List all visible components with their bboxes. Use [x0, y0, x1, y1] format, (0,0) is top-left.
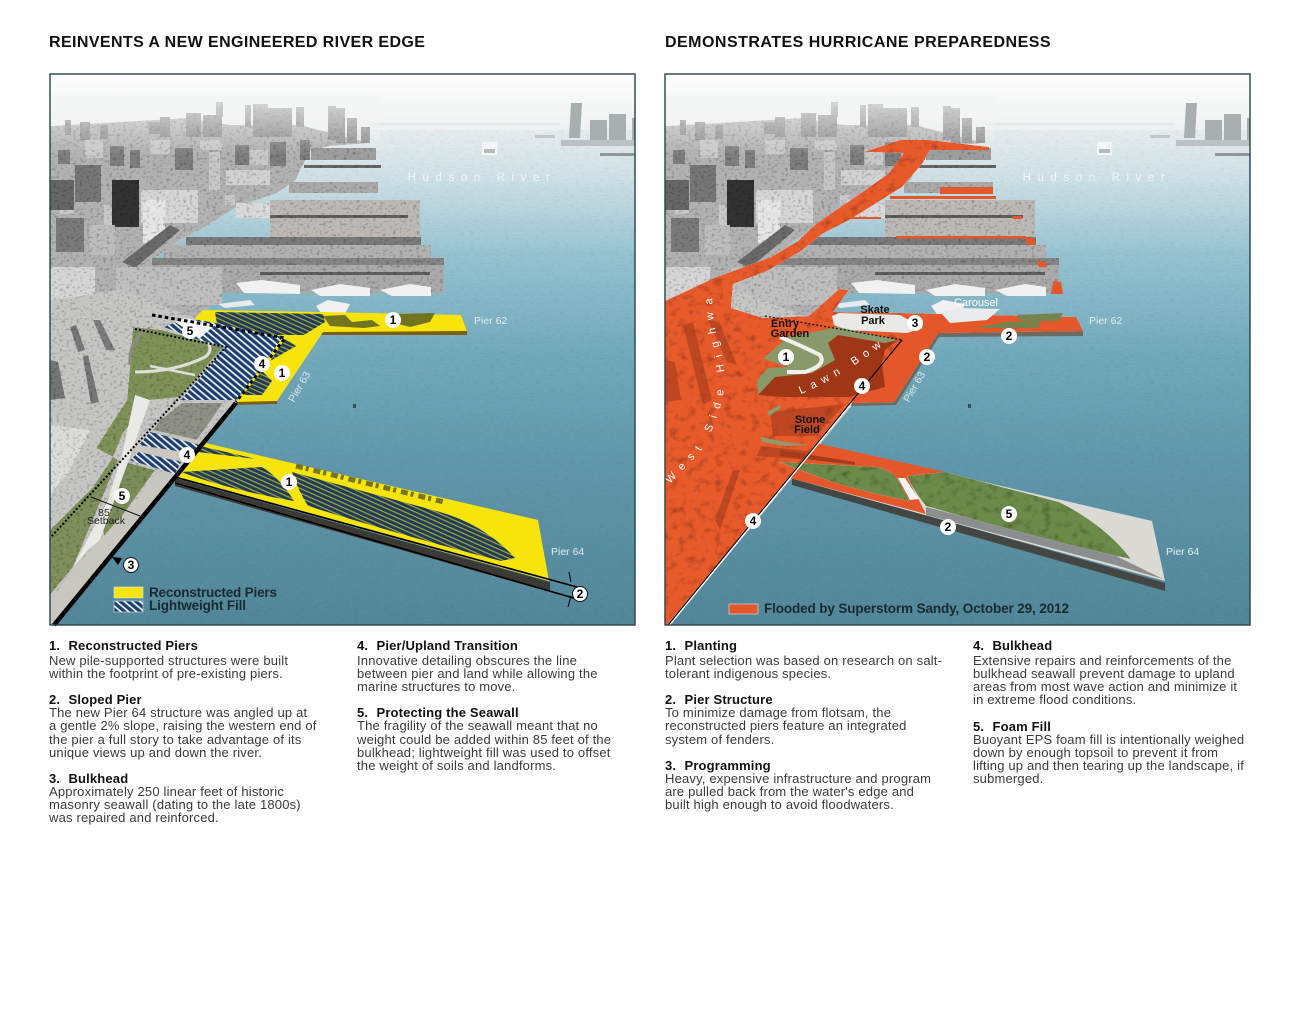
text column 4: areas from most wave action and minimize it [973, 679, 1237, 694]
setback dimension: 85' [98, 507, 112, 519]
text column 1: the pier a full story to take advantage of its [49, 732, 302, 747]
text column 3: Planting [684, 638, 737, 652]
text column 2: 4. [357, 638, 368, 652]
text column 3: 3. [665, 758, 676, 773]
text column 2: weight could be added within 85 feet of the [357, 732, 611, 747]
text column 4: 4. [973, 638, 984, 652]
place labels: Stone [795, 414, 825, 426]
aerial photo base [50, 74, 635, 625]
setback dimension: Setback [87, 515, 126, 527]
legend: Flooded by Superstorm Sandy, October 29, 2012 [764, 601, 1069, 616]
number badges: 4 [184, 448, 191, 462]
text column 1: 3. [49, 771, 60, 786]
number badges: 4 [259, 357, 266, 371]
text column 4: 5. [973, 719, 984, 734]
place labels: Field [794, 424, 820, 436]
garden planting [757, 327, 898, 395]
number badges: 4 [859, 379, 866, 393]
text column 1: 2. [49, 692, 60, 707]
dotted line: pier and land boundary [50, 315, 285, 538]
carousel [940, 308, 1000, 323]
text column 1: within the footprint of pre-existing piers. The new Pier 64 structure was angled up at [49, 666, 307, 720]
pier 62 planting [979, 313, 1063, 328]
slope dimension lines [175, 477, 577, 607]
text column 3: Programming [684, 758, 771, 773]
number badges: 1 [279, 366, 286, 380]
text column 1: a gentle 2% slope, raising the western end of [49, 718, 317, 733]
text column 2: marine structures to move. The fragility of the seawall meant that no [357, 679, 598, 733]
text column 2: bulkhead; lightweight fill was used to offset [357, 745, 611, 760]
Lawn Bowl label: Lawn Bowl [798, 342, 880, 394]
bulkhead line [668, 340, 902, 625]
pier 64 deck [779, 443, 1165, 591]
text column 3: Pier Structure [684, 692, 773, 707]
text column 2: the weight of soils and landforms. [357, 758, 556, 773]
text column 2: Innovative detailing obscures the line [357, 652, 577, 668]
bulkhead line [54, 403, 236, 625]
place labels: Garden [771, 328, 810, 340]
number badges: 5 [1006, 507, 1013, 521]
pier 63 label: Pier 63 [901, 370, 928, 404]
place labels [771, 304, 890, 436]
pier 62 and 63 yellow deck [194, 310, 467, 405]
text column 1 [49, 638, 317, 825]
Hudson River label: Hudson River [408, 172, 556, 184]
text column 1: Sloped Pier [68, 692, 142, 707]
text column 3: built high enough to avoid floodwaters. [665, 797, 894, 812]
text column 1: unique views up and down the river. Approximately 250 linear feet of historic [49, 745, 284, 799]
number badges [114, 312, 588, 602]
lawn bowl [758, 335, 898, 397]
text column 3: tolerant indigenous species. To minimize damage from flotsam, the [665, 666, 891, 720]
pier 64 yellow deck [175, 442, 550, 592]
text column 4 [973, 638, 1244, 786]
pier 62 label: Pier 62 [474, 315, 507, 327]
text column 3: reconstructed piers feature an integrated [665, 718, 907, 733]
flood extent: land and upper road [665, 140, 1083, 625]
carousel label: Carousel [954, 297, 998, 309]
number badges [745, 315, 1017, 535]
heading: river edge: REINVENTS A NEW ENGINEERED RIVER EDGE [49, 34, 425, 51]
text column 3: 1. [665, 638, 676, 652]
number badges: 5 [119, 489, 126, 503]
text column 3: are pulled back from the water's edge and [665, 784, 914, 799]
text column 4: in extreme flood conditions. Buoyant EPS foam fill is intentionally weighed [973, 692, 1244, 747]
pier 64 label: Pier 64 [551, 546, 584, 558]
text column 1: was repaired and reinforced. [49, 810, 219, 825]
skate park [832, 313, 923, 333]
pier 64 label: Pier 64 [1166, 546, 1199, 558]
text column 2 [357, 638, 611, 773]
West Side Highway label: West Side Highway [666, 298, 724, 482]
text column 4: Bulkhead [992, 638, 1052, 652]
text column 3: Plant selection was based on research on salt- [665, 652, 942, 668]
number badges: 1 [783, 350, 790, 364]
seawall line [669, 403, 851, 625]
place labels: Entry [771, 318, 800, 330]
text column 4: Foam Fill [992, 719, 1051, 734]
text column 4: Extensive repairs and reinforcements of the [973, 652, 1231, 668]
number badges: 3 [912, 316, 919, 330]
text column 2: Protecting the Seawall [376, 705, 519, 720]
text column 2: 5. [357, 705, 368, 720]
setback dimension [87, 497, 140, 527]
text column 4: submerged. [973, 771, 1043, 786]
aerial photo base [665, 74, 1250, 625]
text column 1: Bulkhead [68, 771, 128, 786]
pier 63 label: Pier 63 [286, 370, 313, 404]
Hudson River label: Hudson River [1023, 172, 1171, 184]
dashed boundary [765, 316, 902, 340]
pier 62 label: Pier 62 [1089, 315, 1122, 327]
legend [114, 585, 277, 613]
panel: river edge map [50, 74, 635, 625]
panel frame [665, 74, 1250, 625]
text column 1: New pile-supported structures were built [49, 652, 288, 668]
text column 3: 2. [665, 692, 676, 707]
text column 3: system of fenders. Heavy, expensive infrastructure and program [665, 732, 931, 786]
garden path [780, 337, 822, 372]
text column 1: masonry seawall (dating to the late 1800s) [49, 797, 301, 812]
panel: hurricane map [664, 73, 1251, 626]
number badges: 1 [390, 313, 397, 327]
text column 1: Reconstructed Piers [68, 638, 198, 652]
stone field planting [760, 405, 811, 446]
number badges: 1 [286, 475, 293, 489]
text column 4: lifting up and then tearing up the landscape, if [973, 758, 1244, 773]
hatched fill: pier 64 [130, 432, 515, 561]
legend: Lightweight Fill [149, 598, 246, 613]
text column 1: 1. [49, 638, 60, 652]
number badges: 4 [750, 514, 757, 528]
place labels: Park [861, 315, 886, 327]
legend: Reconstructed Piers [149, 585, 277, 600]
number badges: 2 [945, 520, 952, 534]
number badges: 2 [577, 587, 584, 601]
text column 2: between pier and land while allowing the [357, 666, 598, 681]
panel frame [50, 74, 635, 625]
text column 3 [665, 638, 942, 812]
hatched fill: pier 62 and upland [164, 312, 325, 400]
place labels: Skate [860, 304, 890, 316]
heading: hurricane preparedness: DEMONSTRATES HURRICANE PREPAREDNESS [665, 34, 1051, 51]
arrow to bulkhead [112, 557, 122, 565]
text column 4: bulkhead seawall prevent damage to upland [973, 666, 1235, 681]
number badges: 2 [924, 350, 931, 364]
number badges: 2 [1006, 329, 1013, 343]
number badges: 5 [187, 324, 194, 338]
number badges: 3 [128, 558, 135, 572]
text column 2: Pier/Upland Transition [376, 638, 518, 652]
text column 4: down by enough topsoil to prevent it from [973, 745, 1218, 760]
